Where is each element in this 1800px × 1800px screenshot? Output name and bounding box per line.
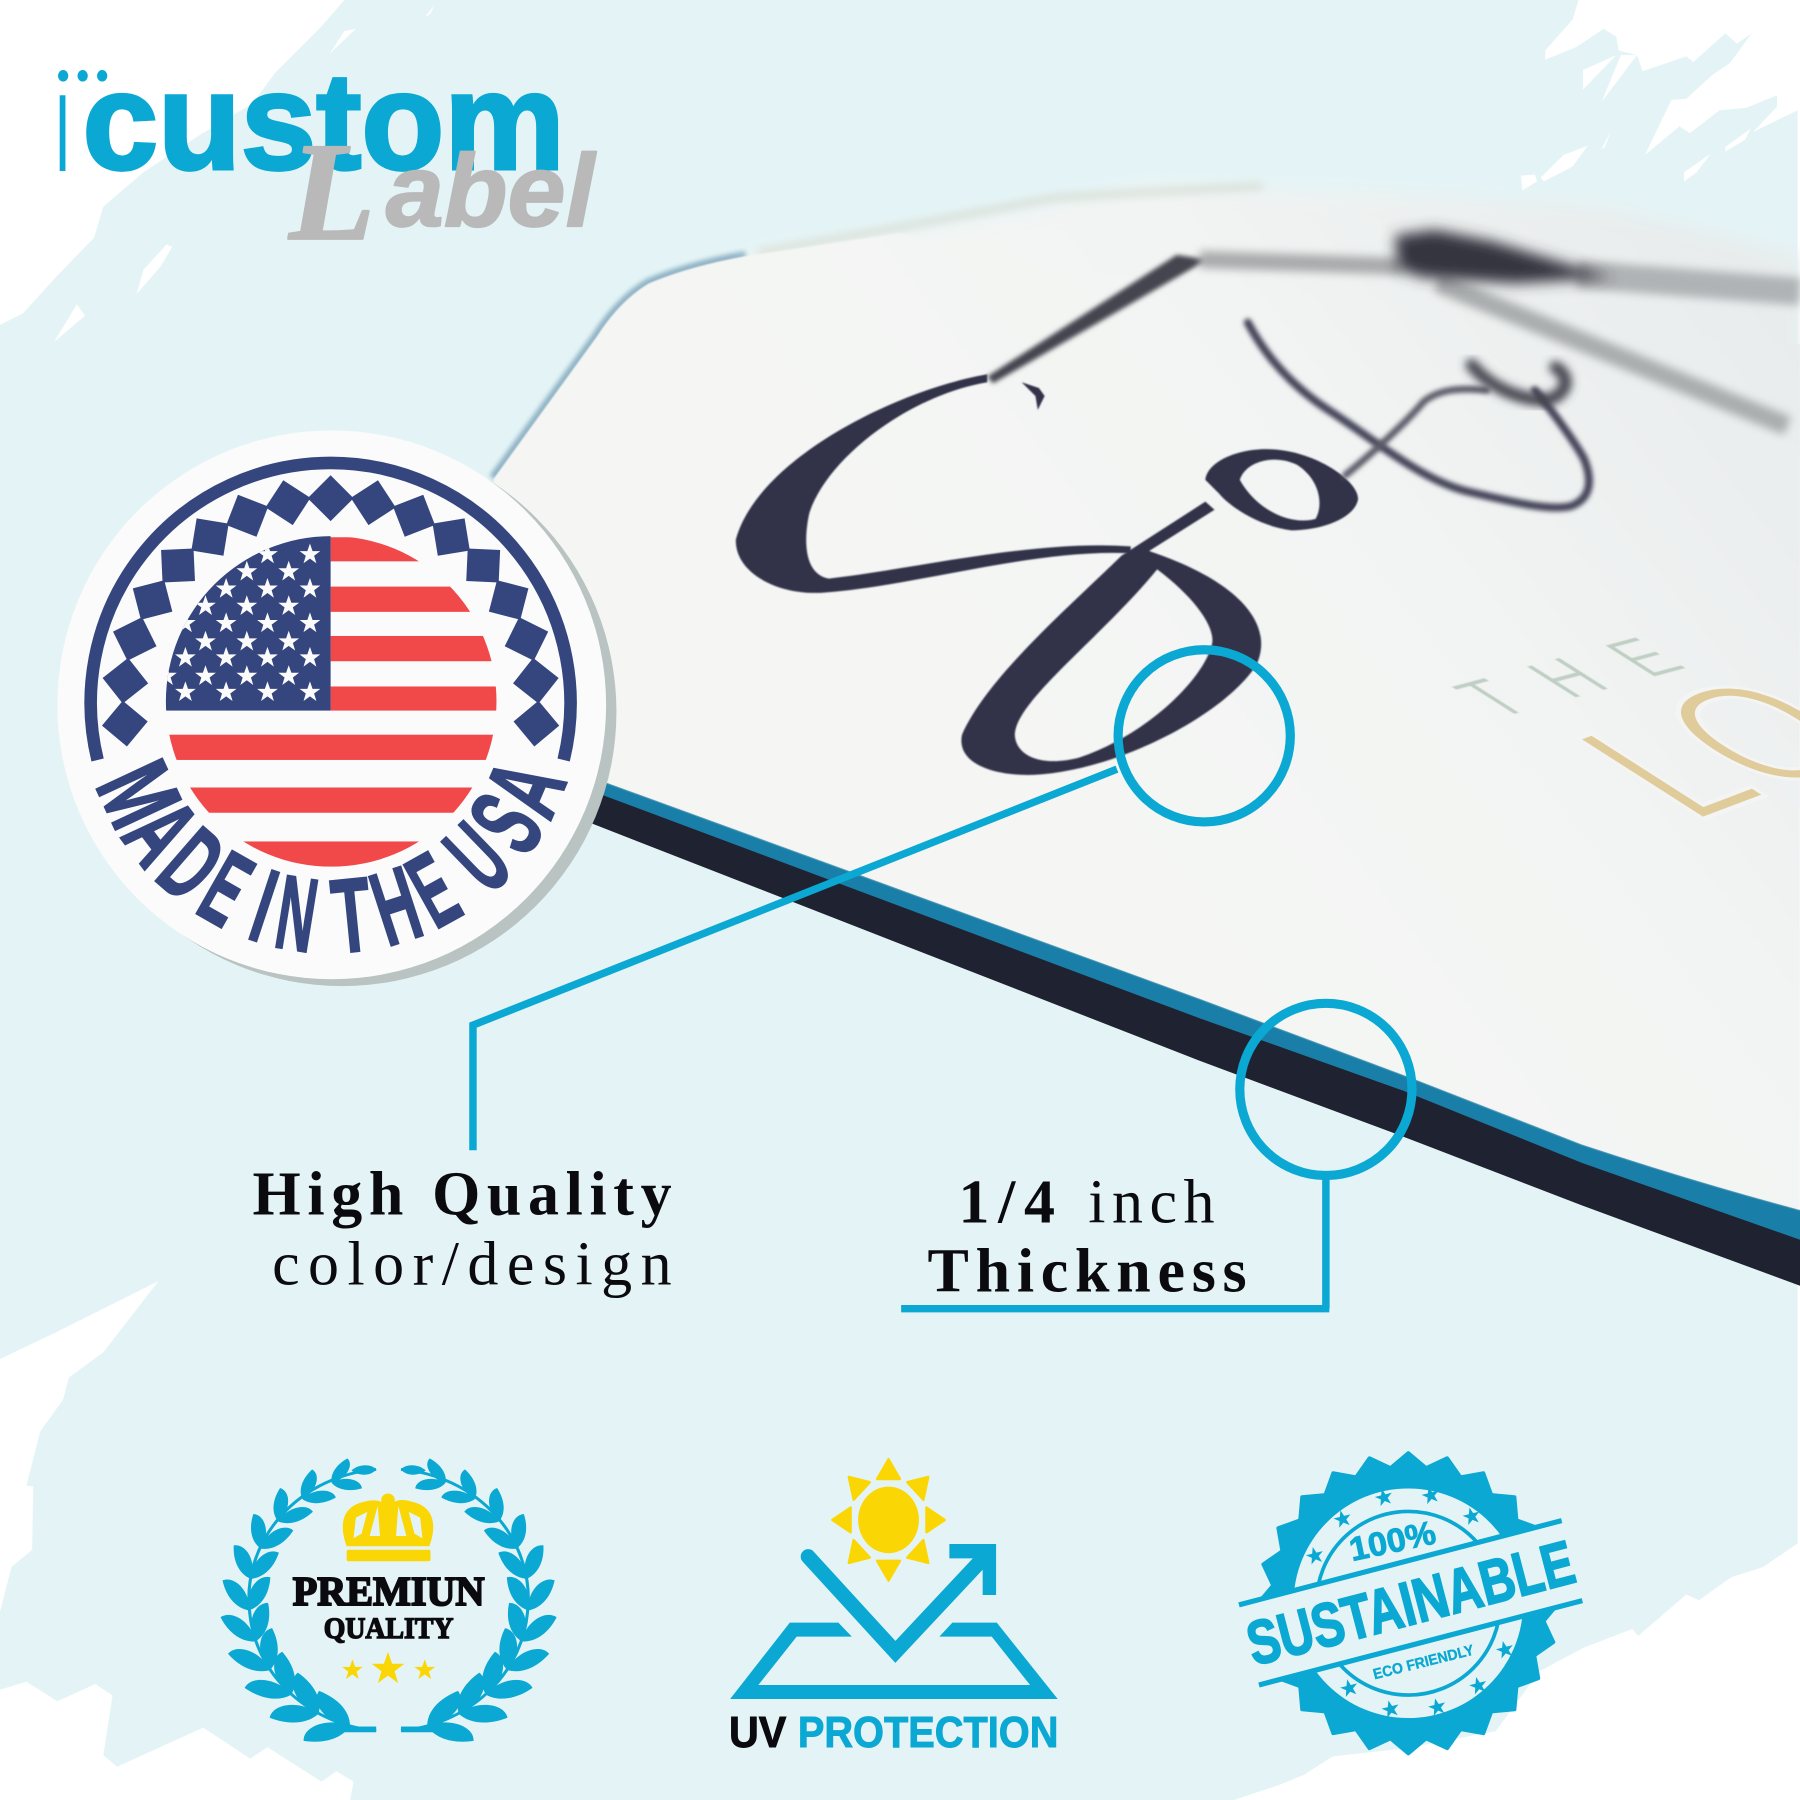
script lettering: connector: [1345, 389, 1487, 475]
serrated seal: [1258, 1453, 1559, 1754]
flag: [156, 535, 498, 868]
word thickness: Thickness: [928, 1237, 1247, 1305]
badge curved text: E: [389, 829, 477, 950]
script lettering: far gray strokes: [1200, 259, 1800, 426]
label uv: UV: [729, 1709, 786, 1757]
logo word custom: custom: [83, 45, 565, 199]
badge curved text: A: [463, 744, 589, 832]
board edge shadow: [494, 256, 746, 479]
crown: [343, 1493, 433, 1561]
reflected ray arrow: [808, 1557, 980, 1652]
blue printed edge: [595, 778, 1800, 1240]
word eco friendly: ECO FRIENDLY: [1371, 1642, 1476, 1683]
badge ring: [91, 463, 571, 760]
leader line: [473, 769, 1117, 1150]
icon: premium quality wreath: [220, 1458, 557, 1751]
icon: uv protection: [729, 1459, 1058, 1757]
badge curved text: N: [269, 852, 325, 975]
label protection: PROTECTION: [798, 1709, 1058, 1757]
near board surface: [494, 233, 1800, 1210]
black foam core edge: [568, 778, 1800, 1286]
tray outline: [730, 1623, 1058, 1699]
fraction: 1/4: [959, 1169, 1055, 1237]
logo word label: abel: [386, 132, 597, 248]
leader line: [901, 1179, 1329, 1309]
badge curved text: M: [74, 744, 205, 844]
ring: [1240, 1003, 1412, 1176]
three stars: [342, 1652, 435, 1683]
badge curved text: H: [358, 845, 434, 970]
logo: [58, 45, 597, 270]
diamond band: [100, 475, 561, 749]
badge curved text: D: [137, 807, 246, 924]
badge curved text: I: [238, 848, 290, 965]
badge curved text: A: [101, 780, 221, 886]
script lettering: blurred upstroke: [987, 255, 1208, 383]
badge curved text: U: [422, 801, 532, 913]
arrow head: [949, 1544, 996, 1595]
faint word THE: THE: [1434, 617, 1740, 728]
ring: [1118, 650, 1290, 822]
left branch: [220, 1458, 376, 1751]
stamp stars: [1304, 1485, 1515, 1719]
heading: High Quality: [253, 1161, 672, 1229]
badge: made in the usa: [57, 430, 616, 986]
badge curved text: S: [447, 775, 567, 873]
icon: sustainable stamp: [1239, 1453, 1582, 1754]
logo word label: [287, 115, 597, 270]
far top edge highlight: [758, 186, 1263, 253]
badge curved text: [74, 744, 589, 976]
script lettering: dot: [1022, 382, 1045, 410]
badge disc: [57, 430, 606, 979]
right branch: [401, 1458, 557, 1751]
word 100 percent: 100%: [1346, 1515, 1439, 1569]
logo i: [58, 70, 107, 171]
script lettering: o: [1205, 449, 1358, 530]
stamp band rules: [1239, 1521, 1582, 1685]
word sustainable: SUSTAINABLE: [1240, 1528, 1582, 1679]
script lettering: far dark stroke: [1395, 230, 1613, 284]
badge shadow: [68, 437, 616, 986]
stamp band: [1239, 1521, 1582, 1685]
badge curved text: T: [327, 856, 377, 976]
word premiun: PREMIUN: [293, 1568, 485, 1614]
photo: foam board sign: [494, 186, 1800, 1286]
far blurred board surface: [746, 186, 1800, 689]
word quality: QUALITY: [324, 1612, 453, 1645]
script lettering: l loop: [1248, 323, 1589, 508]
sun: [832, 1459, 945, 1581]
script lettering: D loop: [961, 502, 1261, 775]
script lettering: C stroke: [736, 374, 1131, 593]
unit: inch: [1088, 1169, 1215, 1237]
badge curved text: E: [182, 828, 271, 949]
callout: thickness: [901, 1003, 1412, 1309]
logo word label: L: [287, 115, 375, 270]
sub text: color/design: [272, 1231, 672, 1299]
laurel wreath: [220, 1458, 557, 1751]
callout: high quality: [253, 650, 1290, 1299]
script lettering: blurred e: [1472, 365, 1566, 400]
